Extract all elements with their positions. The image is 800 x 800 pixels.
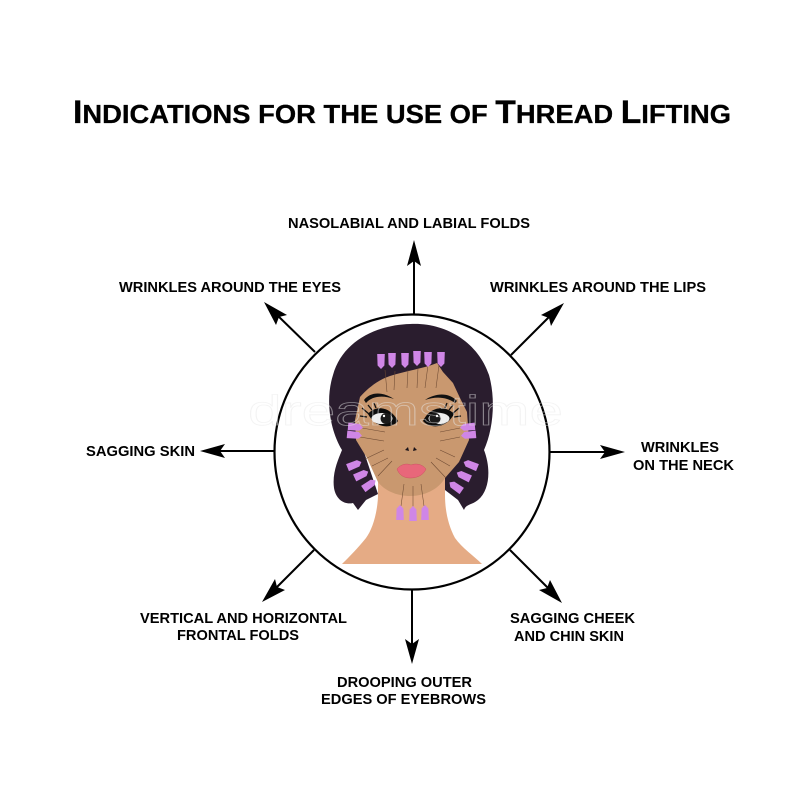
label: wrinkles around the eyes: WRINKLES AROUND THE EYES <box>119 279 341 296</box>
title: INDICATIONS FOR THE USE OF THREAD LIFTING <box>73 94 731 130</box>
nose <box>405 447 417 451</box>
cheek needles <box>346 458 479 494</box>
label: nasolabial and labial folds: NASOLABIAL AND LABIAL FOLDS <box>288 215 530 232</box>
arrow: sagging skin <box>200 444 274 458</box>
right eye <box>423 403 461 426</box>
illustration: woman's face <box>329 324 493 564</box>
arrow: wrinkles on the neck <box>550 445 625 459</box>
arrow: wrinkles around the lips <box>511 303 564 355</box>
face <box>355 363 469 496</box>
forehead needles <box>377 351 445 369</box>
label: sagging skin: SAGGING SKIN <box>86 443 195 460</box>
label: drooping outer edges of eyebrows: DROOPING OUTER <box>337 674 472 691</box>
arrow: drooping outer edges of eyebrows <box>405 590 419 664</box>
left eye <box>360 403 398 426</box>
label: wrinkles around the lips: WRINKLES AROUND THE LIPS <box>490 279 706 296</box>
lips <box>397 464 426 478</box>
thread lines <box>360 365 460 508</box>
label: sagging cheek and chin skin: AND CHIN SKIN <box>514 628 624 645</box>
label: vertical and horizontal frontal folds: VERTICAL AND HORIZONTAL <box>140 610 347 627</box>
circle frame <box>274 314 550 590</box>
label: sagging cheek and chin skin: SAGGING CHEEK <box>510 610 635 627</box>
label: wrinkles on the neck: ON THE NECK <box>633 457 734 474</box>
label: vertical and horizontal frontal folds <box>140 610 347 644</box>
label: wrinkles on the neck: WRINKLES <box>641 439 719 456</box>
label: sagging cheek and chin skin <box>510 610 635 645</box>
arrow: vertical and horizontal frontal folds <box>262 550 314 602</box>
arrow: sagging cheek and chin skin <box>510 550 562 603</box>
label: drooping outer edges of eyebrows <box>321 674 486 708</box>
neck <box>342 475 482 564</box>
arrow: nasolabial and labial folds <box>407 240 421 314</box>
watermark: dreamstime <box>248 387 563 434</box>
arrow: wrinkles around the eyes <box>264 302 315 352</box>
eyebrows <box>364 393 457 403</box>
label: drooping outer edges of eyebrows: EDGES OF EYEBROWS <box>321 691 486 708</box>
temple needles <box>347 423 476 439</box>
label: vertical and horizontal frontal folds: FRONTAL FOLDS <box>177 627 299 644</box>
neck needles <box>396 505 429 521</box>
hair <box>329 324 493 510</box>
label: wrinkles on the neck <box>633 439 734 474</box>
